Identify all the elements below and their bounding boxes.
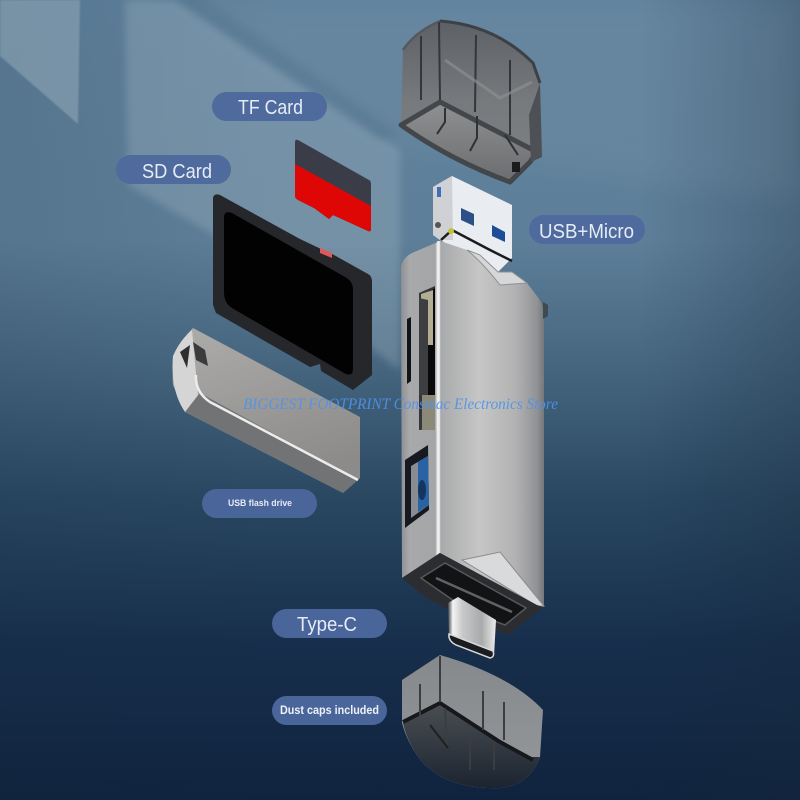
bottom dust cap	[402, 655, 543, 788]
USB flash drive	[172, 328, 360, 493]
cap opening	[401, 102, 537, 182]
label: SD Card	[116, 155, 231, 184]
watermark: BIGGEST FOOTPRINT Consmac Electronics Store	[243, 396, 558, 413]
label: USB+Micro: USB+Micro	[539, 220, 634, 243]
USB port	[405, 445, 429, 528]
label: Dust caps included: Dust caps included	[280, 705, 379, 717]
label: Type-C	[272, 609, 387, 638]
card slots	[407, 286, 435, 430]
chevron detail top	[467, 250, 527, 285]
Type-C end	[402, 552, 544, 658]
USB-A plug	[433, 176, 512, 272]
label: TF Card: TF Card	[238, 96, 303, 119]
label: SD Card: SD Card	[142, 160, 212, 183]
label: USB flash drive	[202, 489, 317, 518]
label: Type-C: Type-C	[297, 613, 357, 636]
label: TF Card	[212, 92, 327, 121]
top dust cap	[401, 21, 542, 182]
SD card	[213, 194, 372, 390]
reader body	[401, 241, 548, 607]
label: Dust caps included	[272, 696, 387, 725]
label: USB flash drive: USB flash drive	[228, 498, 292, 509]
TF card	[295, 140, 371, 231]
side tab	[543, 302, 548, 319]
